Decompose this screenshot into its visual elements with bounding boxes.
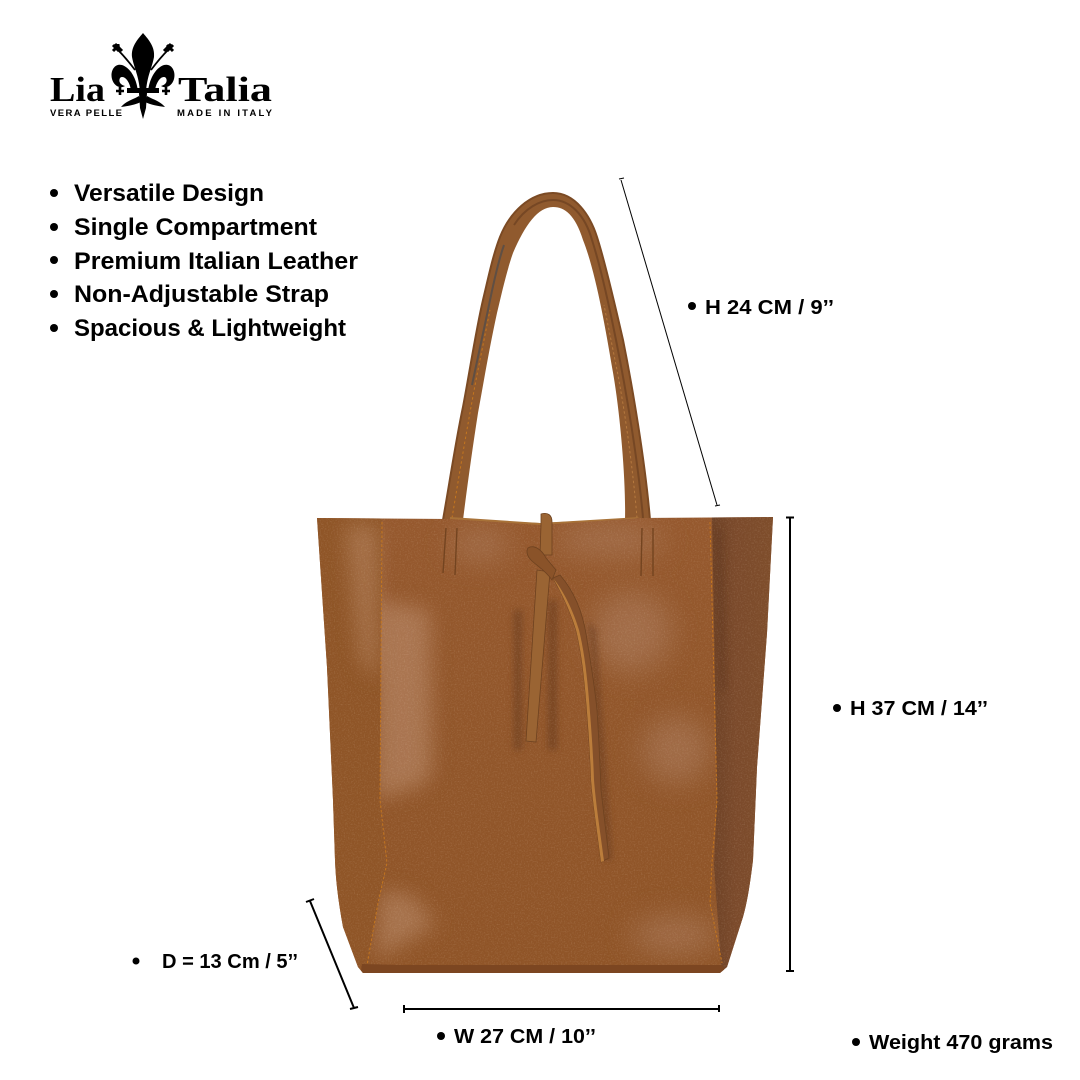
right side panel	[712, 517, 773, 972]
bag body	[310, 510, 780, 980]
logo	[50, 33, 273, 119]
feature list: Versatile Design	[74, 180, 264, 207]
handle seam	[514, 200, 643, 518]
logo wordmark	[50, 70, 273, 119]
logo wordmark: VERA PELLE	[50, 108, 122, 119]
left side sheen	[345, 525, 378, 680]
feature list: Non-Adjustable Strap	[74, 281, 329, 308]
bag inner lining	[450, 517, 640, 525]
icon: fleur-de-lis	[111, 33, 175, 119]
dimension: width	[404, 1005, 719, 1048]
logo wordmark: MADE IN ITALY	[177, 108, 273, 119]
leather shadows	[512, 599, 613, 860]
bag handles	[443, 193, 650, 520]
dimension: depth	[132, 899, 358, 1009]
dimension: width: W 27 CM / 10’’	[454, 1025, 596, 1048]
stitching	[367, 522, 722, 965]
leather tie	[526, 513, 609, 862]
weight label: Weight 470 grams	[869, 1031, 1053, 1054]
front panel highlights	[375, 524, 719, 960]
bag bottom edge	[361, 964, 724, 973]
feature list: Single Compartment	[74, 214, 317, 241]
feature list	[50, 180, 358, 342]
handle tabs	[443, 528, 653, 576]
dimension: handle height	[619, 178, 834, 506]
left side panel	[317, 518, 380, 973]
tote bag	[310, 193, 780, 980]
logo wordmark: Talia	[178, 70, 272, 109]
logo wordmark: Lia	[50, 70, 105, 109]
dimension: handle height: H 24 CM / 9’’	[705, 296, 834, 319]
dimension: bag height	[786, 518, 988, 971]
feature list: Spacious & Lightweight	[74, 315, 346, 342]
feature list: Premium Italian Leather	[74, 248, 358, 275]
dimension: depth: D = 13 Cm / 5’’	[162, 951, 298, 973]
dimension: bag height: H 37 CM / 14’’	[850, 697, 988, 720]
